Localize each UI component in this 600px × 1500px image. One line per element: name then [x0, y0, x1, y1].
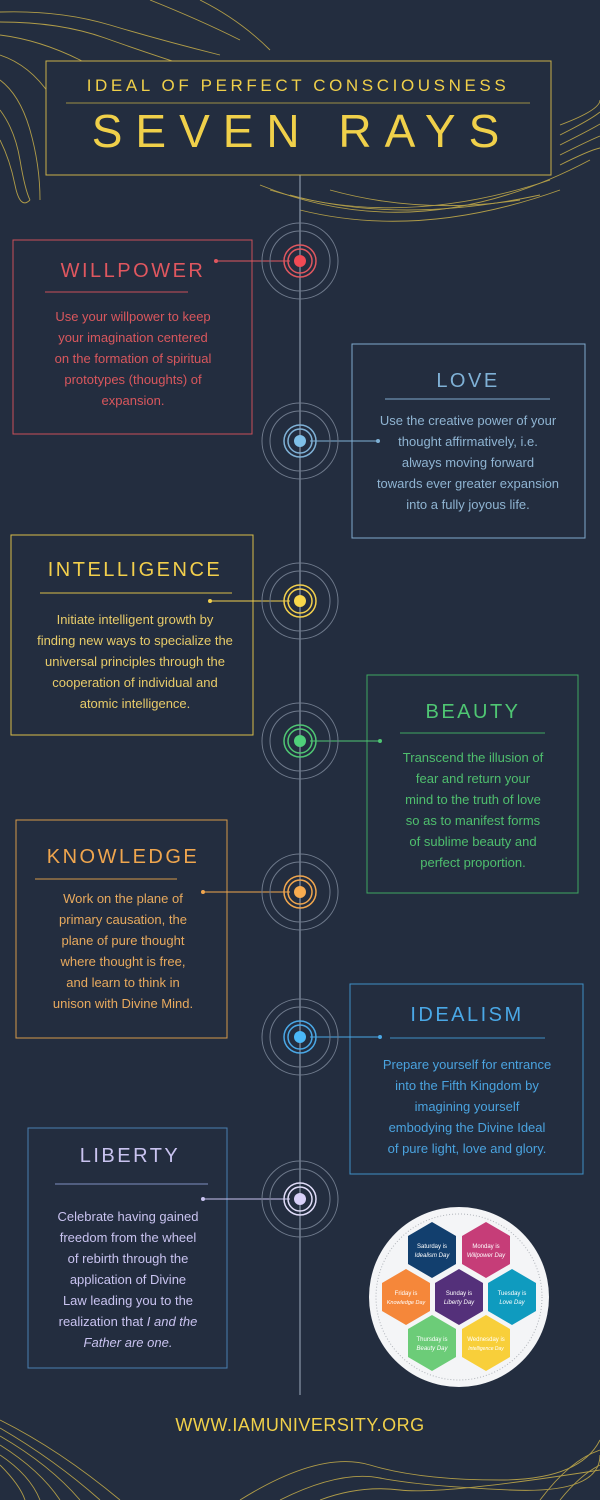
title box: SEVEN RAYS	[92, 105, 512, 157]
footer url: WWW.IAMUNIVERSITY.ORG	[175, 1415, 425, 1435]
hexagon day wheel: Thursday is	[416, 1337, 448, 1343]
panel: liberty	[28, 1128, 227, 1368]
hexagon day wheel: Monday is	[472, 1244, 500, 1250]
panel: intelligence: INTELLIGENCE	[48, 559, 222, 581]
panel: idealism	[350, 984, 583, 1174]
node: willpower	[214, 223, 338, 299]
panel: beauty	[367, 675, 578, 893]
title box: IDEAL OF PERFECT CONSCIOUSNESS	[87, 76, 509, 95]
panel: intelligence: universal principles through the	[45, 654, 225, 669]
panel: liberty: Celebrate having gained	[58, 1209, 198, 1224]
panel: beauty: perfect proportion.	[420, 855, 526, 870]
panel: love: Use the creative power of your	[380, 413, 557, 428]
panel: love: always moving forward	[402, 455, 534, 470]
panel: love: towards ever greater expansion	[377, 476, 559, 491]
hexagon day wheel: Sunday is	[446, 1291, 472, 1297]
panel: willpower: Use your willpower to keep	[55, 309, 211, 324]
panel: idealism: imagining yourself	[415, 1099, 520, 1114]
panel: idealism: of pure light, love and glory.	[388, 1141, 546, 1156]
node: liberty	[201, 1161, 338, 1237]
panel: liberty: of rebirth through the	[68, 1251, 188, 1266]
panel: intelligence: Initiate intelligent growth by	[57, 612, 214, 627]
panel: idealism: embodying the Divine Ideal	[389, 1120, 546, 1135]
panel: beauty: of sublime beauty and	[409, 834, 537, 849]
panel: knowledge: primary causation, the	[59, 912, 187, 927]
panel: beauty: fear and return your	[416, 771, 531, 786]
panel: love: LOVE	[436, 370, 500, 392]
panel: intelligence: finding new ways to specialize the	[37, 633, 233, 648]
hexagon day wheel: Saturday is	[417, 1244, 447, 1250]
hexagon day wheel: Beauty Day	[416, 1346, 449, 1352]
panel: liberty: realization that I and the	[59, 1314, 197, 1329]
panel: knowledge	[16, 820, 227, 1038]
node: idealism	[262, 999, 382, 1075]
node: beauty	[262, 703, 382, 779]
panel: knowledge: where thought is free,	[59, 954, 186, 969]
panel: liberty: Father are one.	[84, 1335, 172, 1350]
panel: liberty: LIBERTY	[80, 1145, 180, 1167]
panel: willpower: on the formation of spiritual	[55, 351, 212, 366]
panel: willpower	[13, 240, 252, 434]
title box	[46, 61, 551, 175]
hexagon day wheel: Knowledge Day	[387, 1300, 427, 1306]
panel: love: into a fully joyous life.	[406, 497, 530, 512]
panel: liberty: application of Divine	[70, 1272, 186, 1287]
node: intelligence	[208, 563, 338, 639]
panel: liberty: freedom from the wheel	[60, 1230, 196, 1245]
panel: love: thought affirmatively, i.e.	[398, 434, 538, 449]
hexagon day wheel: Wednesday is	[467, 1337, 505, 1343]
hexagon day wheel: Willpower Day	[467, 1253, 506, 1259]
panel: beauty: Transcend the illusion of	[403, 750, 544, 765]
hexagon day wheel: Love Day	[499, 1300, 526, 1306]
panel: idealism: Prepare yourself for entrance	[383, 1057, 551, 1072]
panel: beauty: mind to the truth of love	[405, 792, 541, 807]
panel: knowledge: and learn to think in	[66, 975, 180, 990]
panel: liberty: Law leading you to the	[63, 1293, 193, 1308]
panel: intelligence: cooperation of individual and	[52, 675, 218, 690]
node: knowledge	[201, 854, 338, 930]
panel: knowledge: unison with Divine Mind.	[53, 996, 193, 1011]
panel: intelligence: atomic intelligence.	[80, 696, 190, 711]
panel: knowledge: KNOWLEDGE	[47, 846, 199, 868]
hexagon day wheel: Intelligence Day	[468, 1346, 504, 1352]
panel: willpower: expansion.	[102, 393, 164, 408]
panel: beauty: BEAUTY	[425, 701, 521, 723]
hexagon day wheel: Tuesday is	[498, 1291, 526, 1297]
hexagon day wheel: Friday is	[395, 1291, 417, 1297]
panel: willpower: your imagination centered	[58, 330, 208, 345]
panel: willpower: WILLPOWER	[61, 260, 205, 282]
panel: knowledge: Work on the plane of	[63, 891, 183, 906]
panel: beauty: so as to manifest forms	[406, 813, 541, 828]
hexagon day wheel	[369, 1207, 549, 1387]
node: love	[262, 403, 380, 479]
panel: love	[352, 344, 585, 538]
hexagon day wheel: Liberty Day	[444, 1300, 475, 1306]
timeline line	[299, 175, 301, 1395]
hexagon day wheel: Idealism Day	[415, 1253, 450, 1259]
panel: idealism: IDEALISM	[410, 1004, 524, 1026]
panel: intelligence	[11, 535, 253, 735]
panel: willpower: prototypes (thoughts) of	[64, 372, 202, 387]
panel: idealism: into the Fifth Kingdom by	[395, 1078, 539, 1093]
panel: knowledge: plane of pure thought	[62, 933, 185, 948]
